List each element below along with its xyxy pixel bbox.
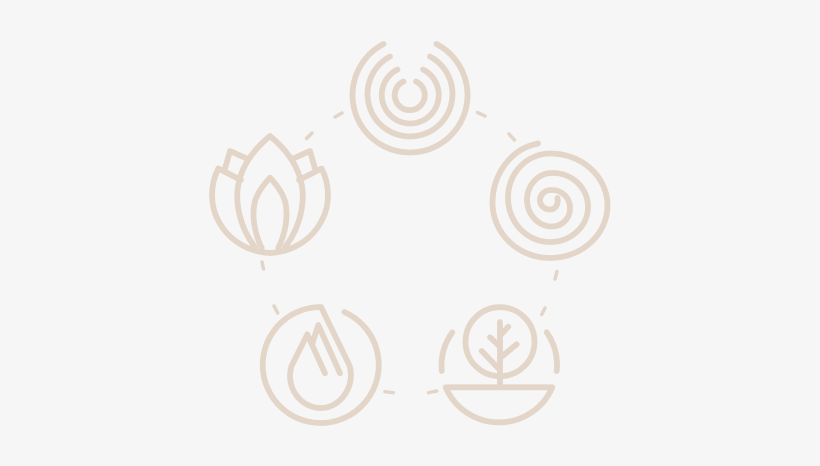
icon: tree in bowl: [441, 307, 557, 422]
connector dashes between icons: [262, 112, 557, 393]
icon: concentric rings: [352, 44, 467, 153]
icon: lotus: [212, 136, 328, 253]
icon: spiral: [492, 144, 608, 258]
icon: water drop in circle: [263, 307, 379, 423]
